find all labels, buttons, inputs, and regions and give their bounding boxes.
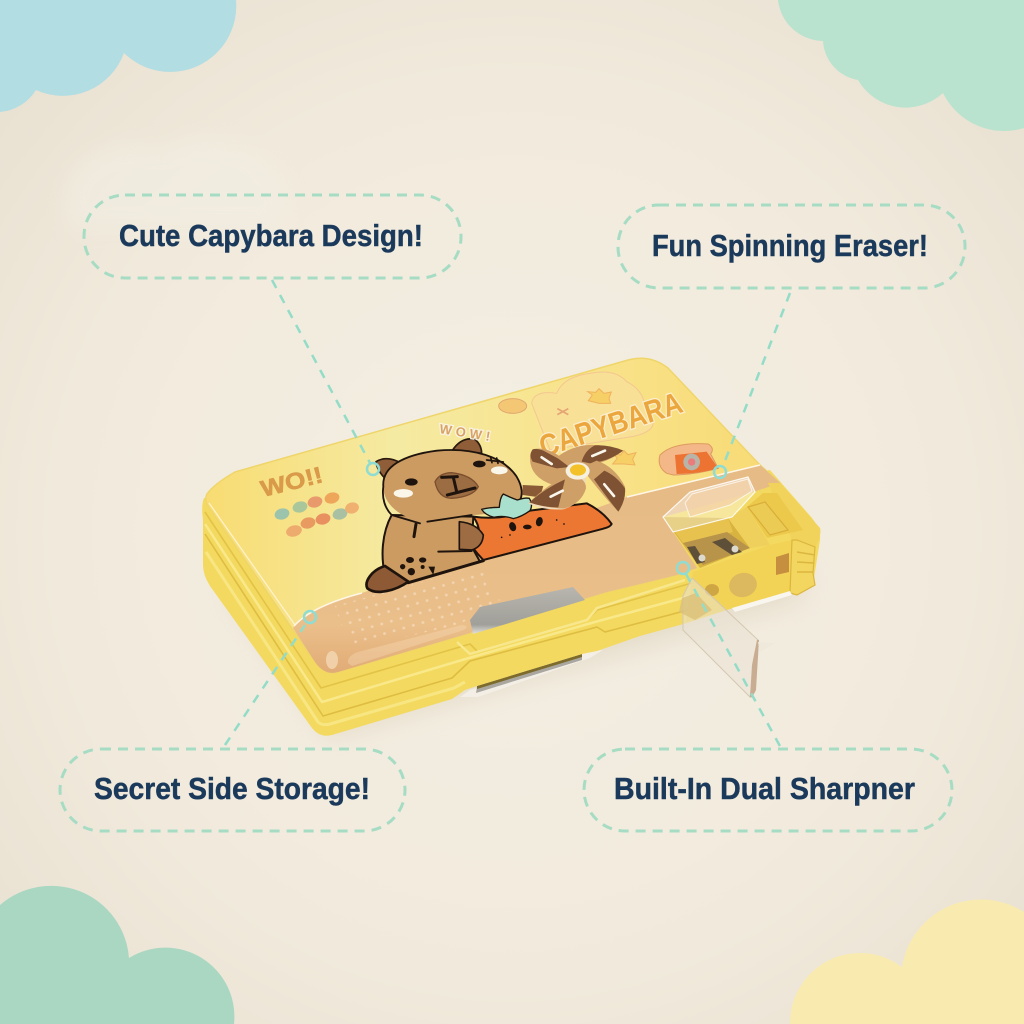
band highlights xyxy=(326,625,467,669)
brow xyxy=(487,457,503,463)
pinwheel xyxy=(528,445,625,512)
leader line: dual sharpener xyxy=(677,562,781,748)
blade dark xyxy=(687,538,742,564)
star xyxy=(588,389,611,403)
muzzle xyxy=(435,473,478,498)
spots xyxy=(400,557,435,575)
clear upper flap xyxy=(663,477,755,532)
carrot marks xyxy=(501,516,565,538)
left graphics: colored tiles xyxy=(273,491,360,538)
cloud: top left xyxy=(0,0,236,112)
carrot xyxy=(473,503,612,560)
white paper strip xyxy=(732,591,792,612)
lower clasp xyxy=(460,650,603,697)
small hole xyxy=(705,584,719,596)
lid left highlight xyxy=(209,503,295,625)
clear lower flap xyxy=(679,578,775,697)
end face xyxy=(686,540,792,622)
blade plate xyxy=(683,532,750,565)
left graphics: WO!! lettering: WO!! xyxy=(258,461,325,502)
sharpener end block xyxy=(663,483,820,622)
pinwheel stem xyxy=(523,485,543,497)
arm xyxy=(459,522,483,550)
square hole xyxy=(776,553,789,575)
side wall xyxy=(728,507,770,548)
upper clasp metal xyxy=(470,587,585,634)
lid tan band xyxy=(293,465,780,673)
top ledge xyxy=(747,493,803,538)
callout: cute capybara design: Cute Capybara Design! xyxy=(119,218,423,253)
left ear xyxy=(376,459,402,478)
cheeks xyxy=(394,466,508,498)
head outline xyxy=(383,450,522,523)
lid xyxy=(206,358,780,673)
end ribs xyxy=(790,540,815,595)
band white edge xyxy=(294,465,760,626)
callout: cute capybara design xyxy=(84,195,461,278)
cloud: bottom left xyxy=(0,886,234,1024)
cloud: top right xyxy=(778,0,1024,131)
back foot xyxy=(367,566,408,592)
CAPYBARA lettering: CAPYBARA xyxy=(535,386,687,464)
cloud: bottom right xyxy=(790,899,1024,1024)
WOW! lettering: WOW! xyxy=(439,421,495,445)
base line xyxy=(408,561,483,583)
compartment interior xyxy=(663,517,750,568)
star small xyxy=(613,451,636,465)
nose xyxy=(442,477,475,495)
callout: fun spinning eraser: Fun Spinning Eraser! xyxy=(652,228,928,263)
capybara and carrot xyxy=(367,439,625,592)
bear outline xyxy=(532,372,653,450)
halftone dots xyxy=(335,566,500,650)
leader line: spinning eraser xyxy=(714,293,790,478)
mini icon xyxy=(499,399,527,413)
leader line: capybara design xyxy=(272,280,379,475)
screws xyxy=(698,546,738,562)
outer rim xyxy=(768,483,820,547)
leader line: side storage xyxy=(225,611,316,745)
body xyxy=(383,515,480,583)
callout: built-in dual sharpner xyxy=(584,749,952,831)
telephone xyxy=(659,444,718,475)
callout: secret side storage xyxy=(60,749,405,831)
back wall glow xyxy=(675,518,733,543)
cross mark xyxy=(557,409,568,415)
ghost cloud xyxy=(64,138,286,230)
body ridges xyxy=(205,512,692,725)
callout: built-in dual sharpner: Built-In Dual Sharpner xyxy=(614,771,915,806)
carrot leaf xyxy=(482,494,531,519)
front lid lip xyxy=(457,580,685,654)
pencil case xyxy=(202,358,820,736)
rib lines xyxy=(797,552,815,572)
lower clasp metal xyxy=(476,655,582,693)
lower clasp dark edge xyxy=(477,654,582,689)
yellow body xyxy=(202,470,820,736)
pinwheel hub xyxy=(566,462,590,480)
pencil case shadow xyxy=(225,570,810,738)
neck line xyxy=(414,524,416,537)
large hole xyxy=(726,570,760,600)
pinwheel dashes xyxy=(542,451,614,497)
end button xyxy=(748,502,788,535)
callout: secret side storage: Secret Side Storage! xyxy=(94,771,370,806)
arm lines xyxy=(438,548,472,555)
right ear xyxy=(453,439,482,453)
top graphics xyxy=(499,372,718,475)
eyes xyxy=(405,461,486,486)
head xyxy=(383,450,522,522)
callout: fun spinning eraser xyxy=(618,205,965,288)
